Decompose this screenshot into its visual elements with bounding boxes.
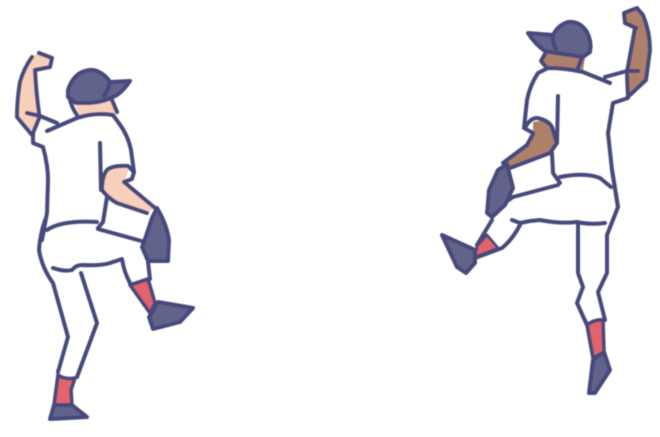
left pitcher cap <box>68 70 130 103</box>
right pitcher forearm <box>503 118 557 168</box>
right pitcher cap <box>528 22 591 57</box>
right pitcher jersey <box>524 68 638 207</box>
right pitcher pants and legs <box>475 170 618 325</box>
left pitcher jersey <box>27 113 134 240</box>
right pitcher shoes <box>442 235 610 393</box>
right pitcher neck <box>541 52 585 70</box>
left pitcher neck <box>70 98 117 118</box>
left pitcher shoes <box>50 302 193 419</box>
figure: left pitcher <box>17 53 193 419</box>
right pitcher red socks <box>475 235 604 358</box>
left pitcher forearm <box>102 165 155 213</box>
left pitcher pants and legs <box>39 220 150 377</box>
right pitcher raised arm <box>624 8 650 95</box>
right pitcher glove <box>487 164 513 217</box>
left pitcher red socks <box>54 279 155 406</box>
left pitcher raised arm <box>17 53 52 135</box>
left pitcher glove <box>142 208 169 261</box>
figure: right pitcher <box>442 8 650 393</box>
